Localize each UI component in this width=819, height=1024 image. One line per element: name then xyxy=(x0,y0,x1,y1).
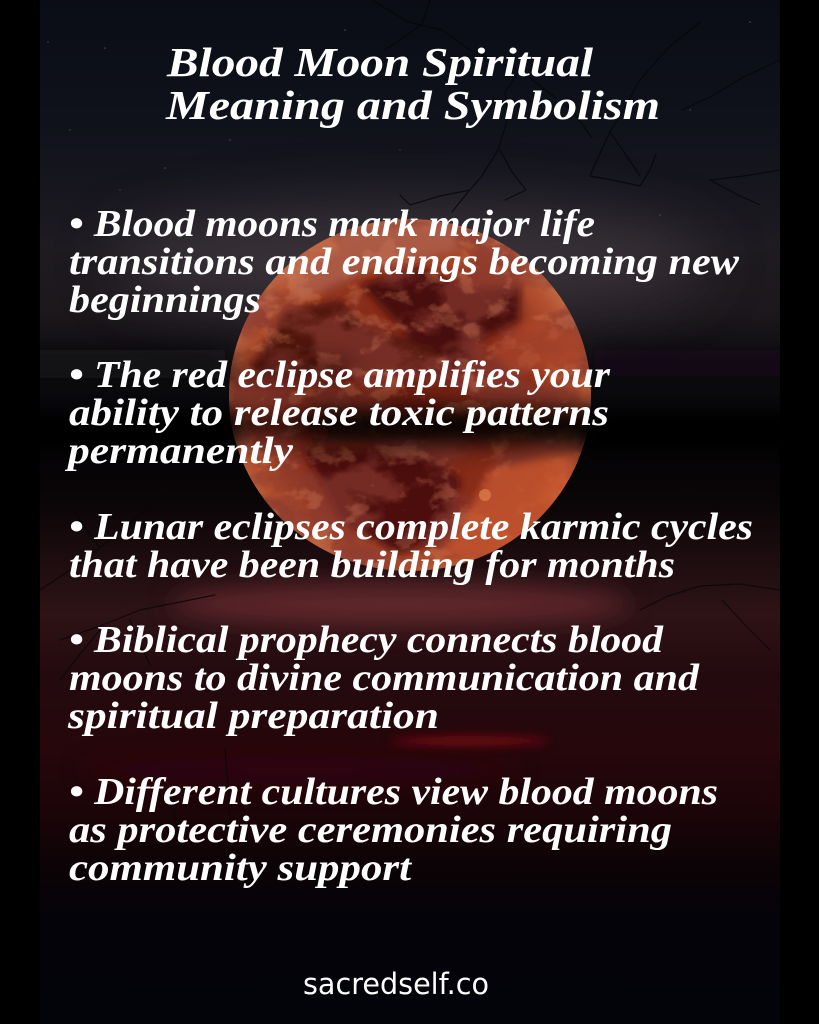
title: Blood Moon Spiritual xyxy=(166,39,594,85)
surface texture xyxy=(225,215,595,575)
bullet 1: life transitions: transitions and endings becoming new xyxy=(69,241,740,283)
grey haze behind moon xyxy=(110,204,710,320)
lunar bright highlights xyxy=(280,222,585,560)
bullet 2: release toxic patterns: permanently xyxy=(65,430,293,472)
title xyxy=(165,39,660,128)
crimson streak xyxy=(390,736,550,746)
dark cloud bands xyxy=(229,348,591,462)
bullet 4: biblical prophecy: spiritual preparation xyxy=(67,695,439,737)
red horizon glow xyxy=(80,582,630,784)
bullet 5: different cultures xyxy=(69,771,718,889)
bullet 1: life transitions xyxy=(69,203,740,321)
blood moon xyxy=(229,219,591,571)
tree branches xyxy=(40,0,780,850)
website footer: sacredself.co xyxy=(303,967,489,1001)
bullet 4: biblical prophecy: • Biblical prophecy connects blood xyxy=(69,619,664,661)
bullet 5: different cultures: • Different cultures view blood moons xyxy=(69,771,718,813)
bullet 1: life transitions: beginnings xyxy=(69,279,261,321)
stars xyxy=(47,21,751,216)
bullet 1: life transitions: • Blood moons mark major life xyxy=(69,203,595,245)
bullet 2: release toxic patterns: • The red eclipse amplifies your xyxy=(69,354,611,396)
cloud band across moon xyxy=(200,362,620,444)
bullet 4: biblical prophecy xyxy=(67,619,700,737)
bullet 3: karmic cycles: • Lunar eclipses complete karmic cycles xyxy=(69,506,753,548)
bullet 4: biblical prophecy: moons to divine communication and xyxy=(69,657,700,699)
title: Meaning and Symbolism xyxy=(165,82,660,128)
lunar dark maria xyxy=(250,268,520,555)
bullet 5: different cultures: as protective ceremonies requiring xyxy=(69,809,672,851)
bullet 2: release toxic patterns: ability to release toxic patterns xyxy=(69,392,609,434)
bullet 3: karmic cycles xyxy=(69,506,753,586)
bullet 3: karmic cycles: that have been building for months xyxy=(69,544,675,586)
bullet 2: release toxic patterns xyxy=(65,354,611,472)
bullet 5: different cultures: community support xyxy=(69,847,413,889)
